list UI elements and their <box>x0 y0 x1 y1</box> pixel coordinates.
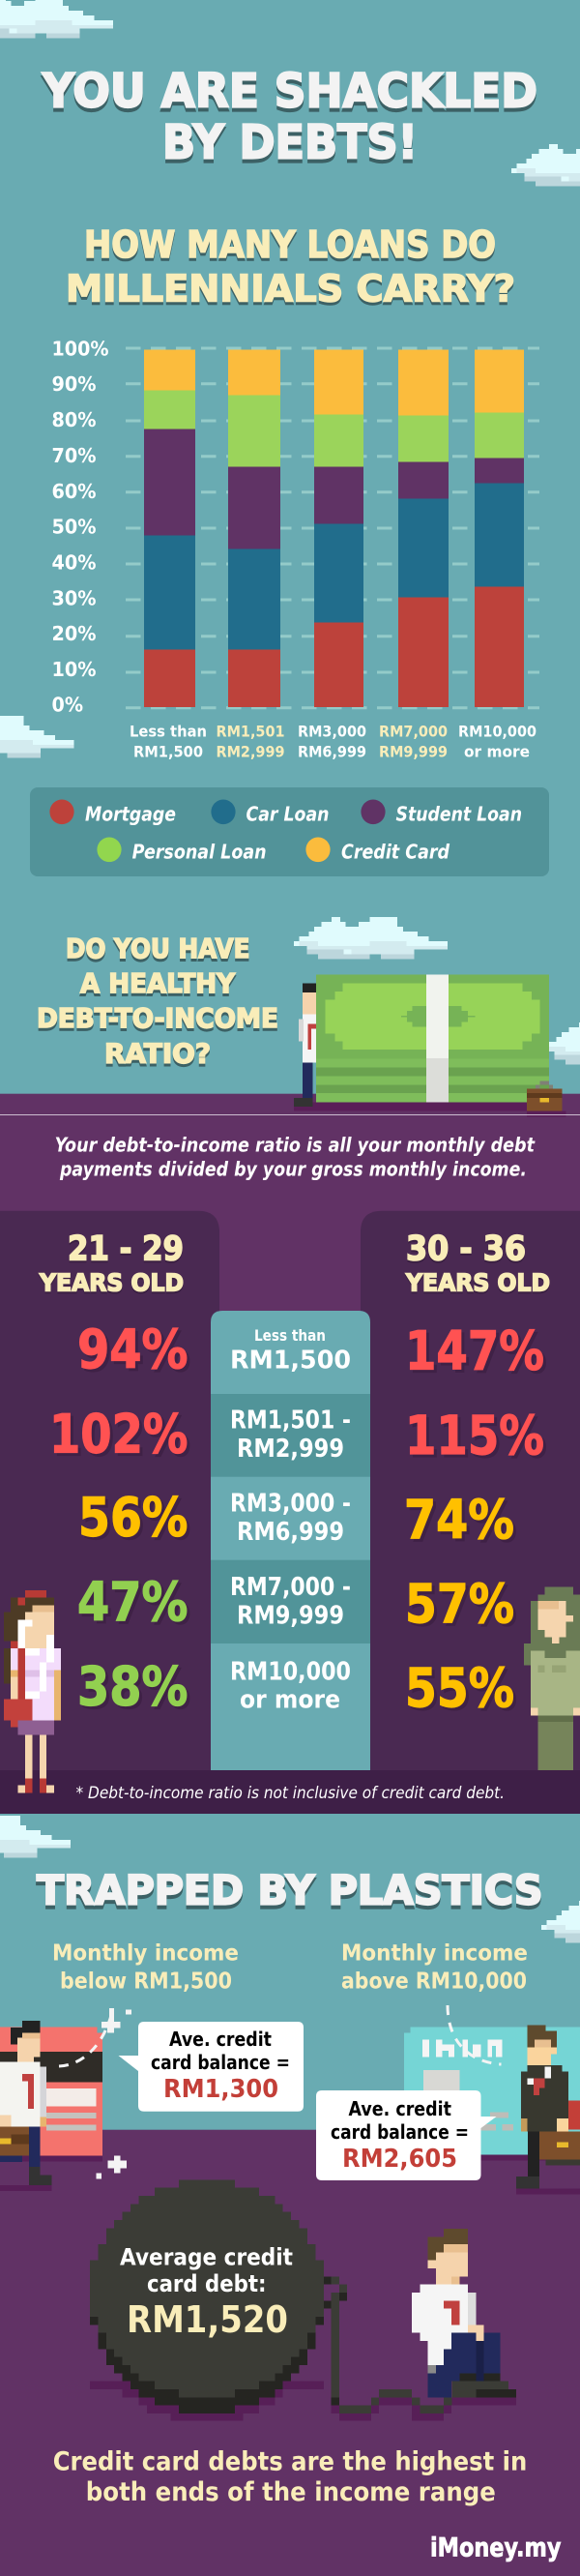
y axis labels: 0% <box>52 694 83 717</box>
illustration: teal credit card <box>404 2028 580 2160</box>
legend: car loan: Car Loan <box>246 802 329 825</box>
age heading right <box>405 1230 550 1296</box>
income labels: RM1,500 <box>230 1346 351 1375</box>
income labels: RM1,501 - <box>230 1406 351 1436</box>
bar: RM1,501 to RM2,999 <box>228 350 280 707</box>
income labels: RM9,999 <box>237 1601 344 1630</box>
callout: high income balance: card balance = <box>331 2120 469 2144</box>
callout: low income balance <box>118 2022 304 2112</box>
cloud: above money <box>294 917 448 959</box>
chain <box>331 2397 451 2421</box>
illustration: ball and chain with sitting man <box>90 2179 516 2421</box>
x axis labels: RM10,000 <box>458 722 536 740</box>
background: teal sky lower section <box>0 1814 580 2130</box>
y axis labels: 80% <box>52 408 97 431</box>
ball text: average credit card debt: card debt: <box>147 2270 267 2297</box>
title: YOU ARE SHACKLED <box>42 65 537 119</box>
ball text: average credit card debt: RM1,520 <box>127 2298 288 2341</box>
x axis labels: RM2,999 <box>217 742 284 760</box>
age heading left: YEARS OLD <box>39 1268 184 1296</box>
y axis labels: 70% <box>52 444 97 467</box>
y axis labels: 50% <box>52 516 97 539</box>
ball shadow <box>90 2382 324 2421</box>
cloud: left of x axis <box>0 716 73 757</box>
heading: healthy debt-to-income ratio: RATIO? <box>104 1038 211 1069</box>
footnote band: * Debt-to-income ratio is not inclusive of credit card debt. <box>75 1784 505 1803</box>
income labels: Less than <box>254 1326 326 1345</box>
values right: 115% <box>405 1405 544 1466</box>
values right: 147% <box>405 1320 544 1382</box>
cloud: trapped section left <box>0 1816 71 1857</box>
x axis labels: RM7,000 <box>379 722 448 740</box>
legend: mortgage <box>49 799 176 825</box>
label: income below RM1,500: below RM1,500 <box>60 1968 232 1995</box>
legend: credit card: Credit Card <box>341 840 450 863</box>
illustration: woman in hijab <box>524 1587 580 1770</box>
legend: mortgage: Mortgage <box>85 802 176 825</box>
label: income below RM1,500 <box>52 1939 239 1995</box>
values right: 57% <box>405 1573 514 1635</box>
y axis labels: 100% <box>52 337 108 360</box>
illustration: man in suit right <box>516 2025 580 2194</box>
chart gridlines <box>126 348 539 708</box>
values left: 102% <box>49 1404 188 1466</box>
cloud: top right <box>511 144 580 186</box>
conclusion text <box>53 2446 527 2507</box>
callout: low income balance: Ave. credit <box>169 2028 272 2051</box>
dashed curve left <box>59 2008 113 2066</box>
legend: student loan <box>361 799 522 825</box>
values left: 47% <box>77 1571 188 1633</box>
income labels: RM3,000 - <box>230 1490 351 1519</box>
heading: trapped by plastics: TRAPPED BY PLASTICS <box>37 1866 543 1913</box>
y axis labels: 60% <box>52 480 97 503</box>
legend: car loan <box>211 799 329 825</box>
divider line <box>0 1114 580 1115</box>
conclusion text: Credit card debts are the highest in <box>53 2446 527 2476</box>
heading: how many loans: MILLENNIALS CARRY? <box>66 267 515 310</box>
legend: personal loan <box>97 838 267 863</box>
callout: low income balance: RM1,300 <box>163 2075 278 2104</box>
age heading right: YEARS OLD <box>405 1268 550 1296</box>
y axis labels: 40% <box>52 551 97 575</box>
callout: high income balance: Ave. credit <box>348 2097 451 2120</box>
age heading left <box>39 1230 184 1296</box>
x axis labels: RM6,999 <box>298 742 366 760</box>
income labels: RM10,000 <box>230 1658 351 1687</box>
y axis labels: 90% <box>52 372 97 396</box>
x axis labels: Less than <box>130 722 207 740</box>
sparkles <box>96 2008 131 2179</box>
x axis labels: RM9,999 <box>379 742 448 760</box>
ball text: average credit card debt <box>120 2244 293 2341</box>
income labels: RM6,999 <box>237 1518 344 1547</box>
x axis labels: RM1,501 <box>217 722 284 740</box>
legend: credit card <box>305 838 450 863</box>
footnote band <box>0 1770 580 1814</box>
cloud: trapped section right <box>541 1901 580 1942</box>
age heading left: 21 - 29 <box>68 1230 184 1269</box>
x axis labels <box>130 722 536 760</box>
cloud: behind money right <box>541 1022 580 1064</box>
man with briefcase left <box>0 2021 52 2191</box>
callout: low income balance: card balance = <box>151 2051 290 2074</box>
illustration: woman with red bag <box>4 1590 61 1792</box>
ball <box>90 2179 324 2413</box>
age heading right: 30 - 36 <box>406 1230 526 1269</box>
y axis labels <box>52 337 108 717</box>
legend panel <box>30 787 549 876</box>
panel: age 30-36 <box>361 1211 580 1770</box>
dashed curve right <box>448 2005 501 2064</box>
sitting man <box>412 2229 516 2406</box>
x axis labels: or more <box>464 742 530 760</box>
background: purple ground lower section <box>0 2130 580 2576</box>
values left: 38% <box>77 1656 188 1718</box>
intro text <box>55 1134 536 1181</box>
x axis labels: RM3,000 <box>298 722 366 740</box>
ground shadow <box>294 1102 566 1116</box>
background: purple ground <box>0 1094 580 1771</box>
bar: RM10,000 or more <box>475 350 524 707</box>
values left: 56% <box>78 1487 188 1549</box>
money stack <box>316 975 549 1102</box>
callout: high income balance <box>316 2090 497 2180</box>
income labels: RM7,000 - <box>230 1573 351 1602</box>
label: income above RM10,000: Monthly income <box>341 1939 528 1967</box>
bar: less than RM1,500 <box>144 350 195 707</box>
income labels: RM2,999 <box>237 1435 344 1464</box>
y axis labels: 10% <box>52 658 97 681</box>
heading: healthy debt-to-income ratio: A HEALTHY <box>80 968 236 999</box>
heading: how many loans <box>66 223 515 310</box>
heading: healthy debt-to-income ratio: DO YOU HAVE <box>66 933 249 964</box>
stacked bar chart: loans by income <box>52 337 539 717</box>
heading: healthy debt-to-income ratio <box>37 933 278 1069</box>
income labels <box>230 1326 351 1715</box>
illustration: man, money stack and suitcase <box>294 975 566 1116</box>
values right <box>404 1320 544 1719</box>
conclusion text: both ends of the income range <box>86 2477 496 2507</box>
x axis labels: RM1,500 <box>133 742 203 760</box>
label: income above RM10,000 <box>341 1939 528 1995</box>
values left: 94% <box>77 1318 188 1380</box>
centre column: income bands <box>211 1311 370 1770</box>
suitcase <box>527 1081 563 1110</box>
label: income above RM10,000: above RM10,000 <box>341 1968 527 1995</box>
man behind money <box>294 984 316 1107</box>
callout: high income balance: RM2,605 <box>342 2145 457 2174</box>
income labels: or more <box>240 1686 340 1715</box>
legend: student loan: Student Loan <box>396 802 522 825</box>
illustration: red credit card with man <box>0 2008 131 2191</box>
heading: how many loans: HOW MANY LOANS DO <box>84 223 496 266</box>
legend: personal loan: Personal Loan <box>132 840 267 863</box>
bar: RM3,000 to RM6,999 <box>314 350 363 707</box>
y axis labels: 20% <box>52 622 97 645</box>
y axis labels: 30% <box>52 586 97 609</box>
title <box>42 65 537 169</box>
values right: 74% <box>404 1489 514 1551</box>
ball text: average credit card debt: Average credit <box>120 2244 293 2271</box>
values right: 55% <box>405 1657 514 1719</box>
title: BY DEBTS! <box>162 115 418 169</box>
bar: RM7,000 to RM9,999 <box>398 350 449 707</box>
panel: age 21-29 <box>0 1211 219 1770</box>
label: income below RM1,500: Monthly income <box>52 1939 239 1967</box>
heading: healthy debt-to-income ratio: DEBT-TO-INCOME <box>37 1003 278 1034</box>
values left <box>49 1318 188 1718</box>
cloud: top left <box>0 0 113 38</box>
background: teal sky <box>0 0 580 1094</box>
